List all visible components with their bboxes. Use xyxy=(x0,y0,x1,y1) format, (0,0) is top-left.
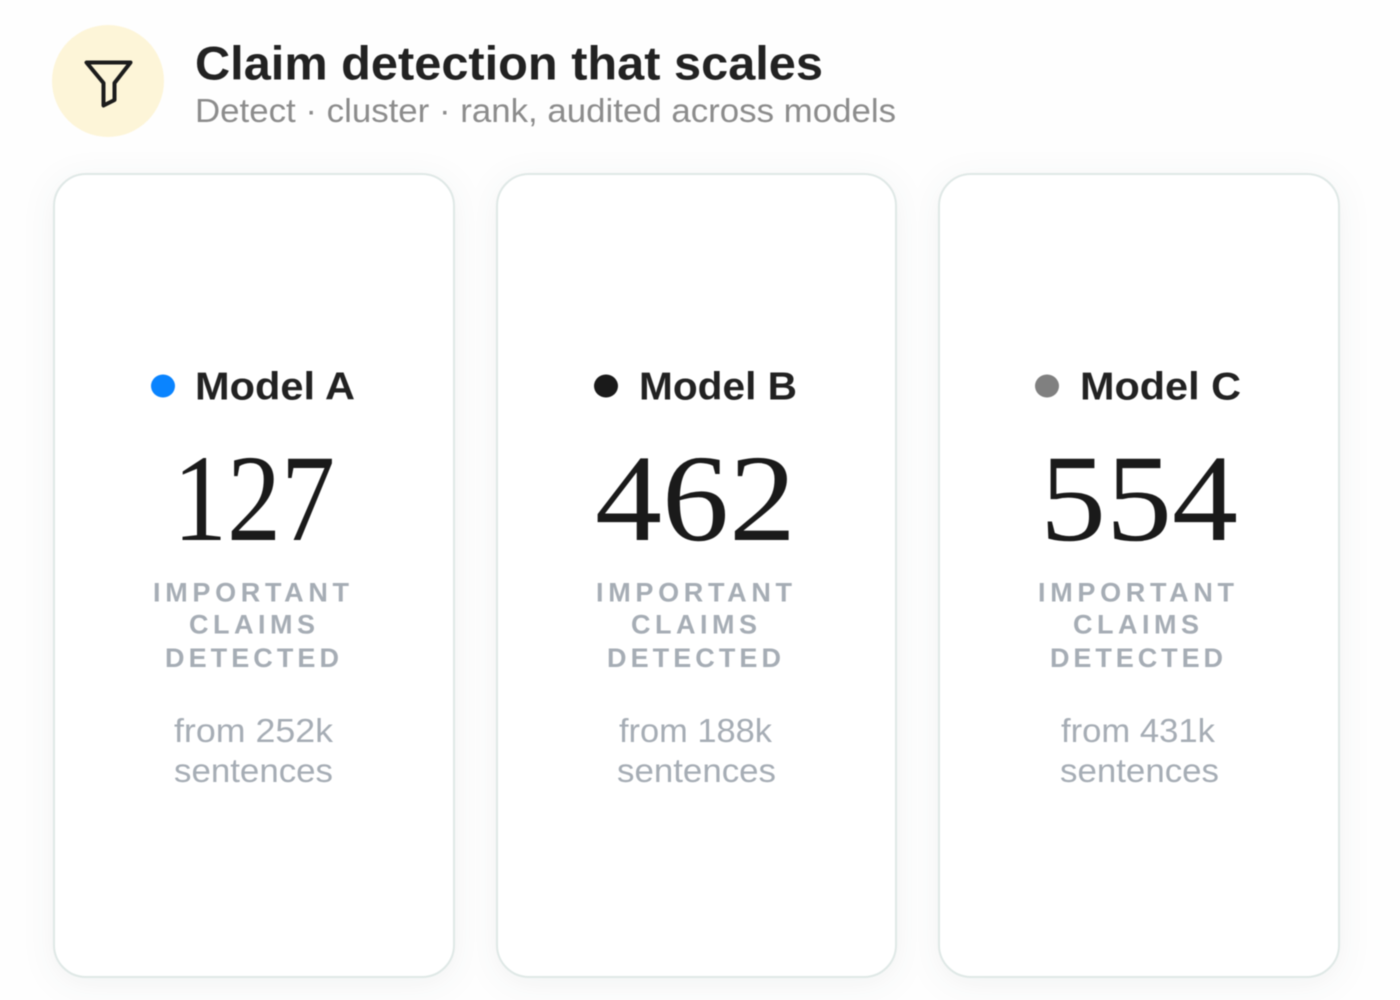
metric label: Model B: CLAIMS xyxy=(631,610,757,640)
header xyxy=(52,25,896,137)
panel: Model B xyxy=(497,174,896,977)
model name: Model B: Model B xyxy=(639,366,797,408)
source note: Model B: from 188k xyxy=(619,712,773,749)
source note: Model A: sentences xyxy=(174,752,333,789)
metric: 127: 127 xyxy=(173,430,335,567)
metric label: Model C: CLAIMS xyxy=(1073,610,1199,640)
metric: 462: 462 xyxy=(595,430,796,567)
model name: Model C: Model C xyxy=(1080,366,1241,408)
legend dot: Model C xyxy=(1035,374,1059,398)
legend dot: Model B xyxy=(594,374,618,398)
source note: Model A xyxy=(174,712,334,789)
legend dot: Model A xyxy=(151,374,175,398)
source note: Model B xyxy=(617,712,776,789)
subtitle: Detect · cluster · rank, audited across models xyxy=(195,92,896,129)
source note: Model C: sentences xyxy=(1060,752,1219,789)
source note: Model A: from 252k xyxy=(174,712,334,749)
source note: Model C xyxy=(1060,712,1219,789)
metric label: Model B xyxy=(596,578,792,673)
metric label: Model A: CLAIMS xyxy=(189,610,315,640)
source note: Model B: sentences xyxy=(617,752,776,789)
metric label: Model B: DETECTED xyxy=(607,643,781,673)
metric: 554: 554 xyxy=(1040,430,1238,567)
panel: Model A xyxy=(54,174,454,977)
metric label: Model C: DETECTED xyxy=(1050,643,1223,673)
metric label: Model A: DETECTED xyxy=(165,643,339,673)
metric label: Model C xyxy=(1038,578,1234,673)
source note: Model C: from 431k xyxy=(1061,712,1216,749)
metric label: Model A: IMPORTANT xyxy=(153,578,350,608)
icon: funnel in yellow circle xyxy=(52,25,164,137)
panel: Model C xyxy=(939,174,1339,977)
metric label: Model C: IMPORTANT xyxy=(1038,578,1234,608)
title: Claim detection that scales xyxy=(195,36,823,90)
metric label: Model A xyxy=(153,578,350,673)
model name: Model A: Model A xyxy=(195,366,355,408)
metric label: Model B: IMPORTANT xyxy=(596,578,792,608)
